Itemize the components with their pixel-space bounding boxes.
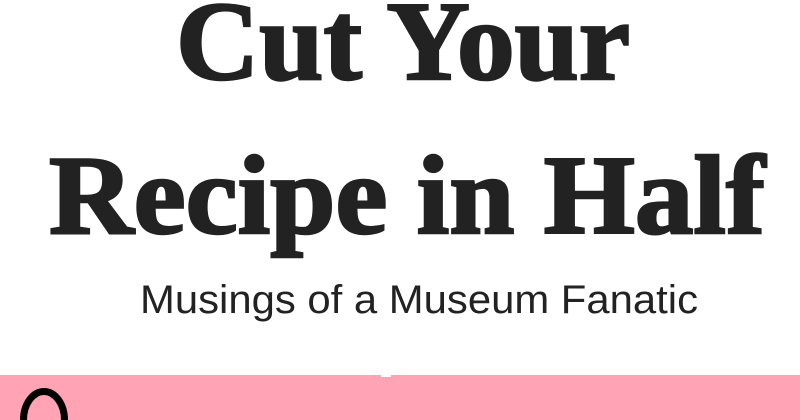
title line 2: Recipe in Half bbox=[49, 134, 767, 258]
icon: cropped black ring bbox=[24, 392, 64, 420]
pink footer band bbox=[0, 375, 800, 420]
subtitle: Musings of a Museum Fanatic bbox=[140, 278, 698, 322]
